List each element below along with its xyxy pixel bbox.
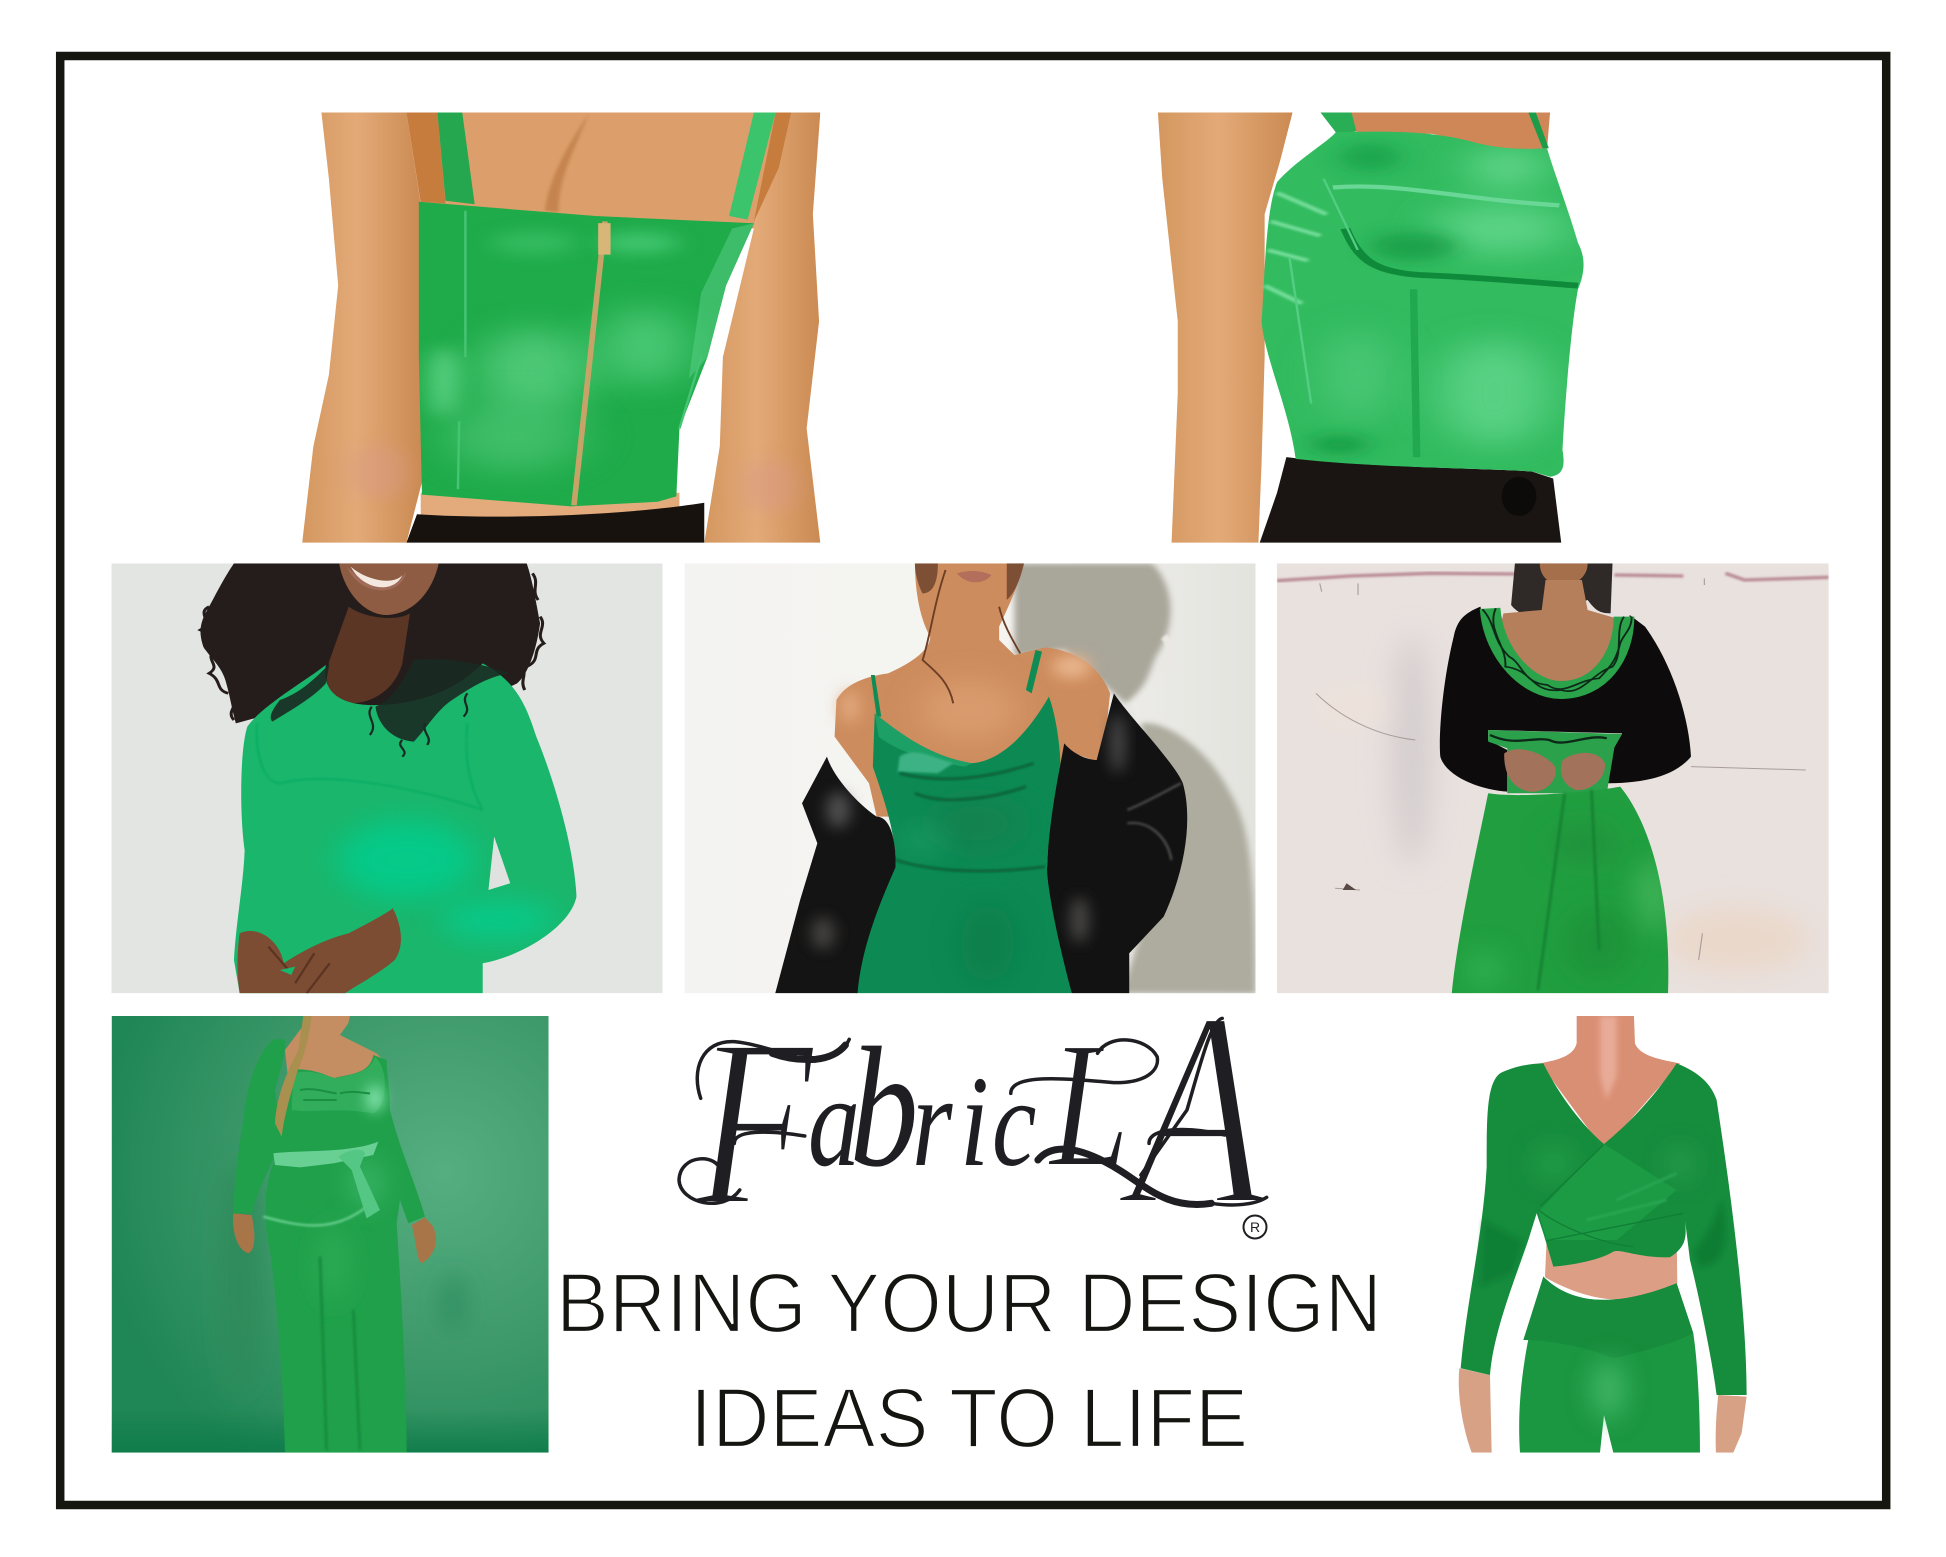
photo: green satin corset, back view xyxy=(302,112,820,543)
registered mark xyxy=(1244,1216,1266,1238)
logo wordmark: F xyxy=(694,990,815,1256)
logo wordmark: b xyxy=(850,1012,918,1203)
photo: green velvet wrap crop top and leggings on mannequin xyxy=(1459,1016,1747,1453)
logo wordmark: c xyxy=(992,1055,1036,1193)
logo wordmark: r xyxy=(912,1050,954,1194)
logo wordmark: L xyxy=(1048,1006,1130,1205)
logo wordmark: i xyxy=(960,1050,989,1194)
photo: green satin top, side view xyxy=(1158,112,1584,543)
photo: woman in green slip dress and black leather jacket xyxy=(685,563,1256,993)
photo: woman in black velvet and green satin dress xyxy=(1277,563,1829,993)
photo: woman in green long-sleeve tee xyxy=(111,563,663,993)
tagline line 1: BRING YOUR DESIGN xyxy=(556,1256,1382,1350)
tagline line 2: IDEAS TO LIFE xyxy=(690,1371,1248,1465)
tagline xyxy=(556,1256,1382,1465)
registered mark: R xyxy=(1250,1219,1260,1235)
logo wordmark: a xyxy=(808,1050,860,1194)
FabricLA logo xyxy=(679,953,1267,1264)
logo flourishes xyxy=(679,1018,1267,1205)
logo wordmark: A xyxy=(1117,953,1267,1264)
photo: woman in green velvet outfit on green backdrop xyxy=(112,1016,549,1453)
